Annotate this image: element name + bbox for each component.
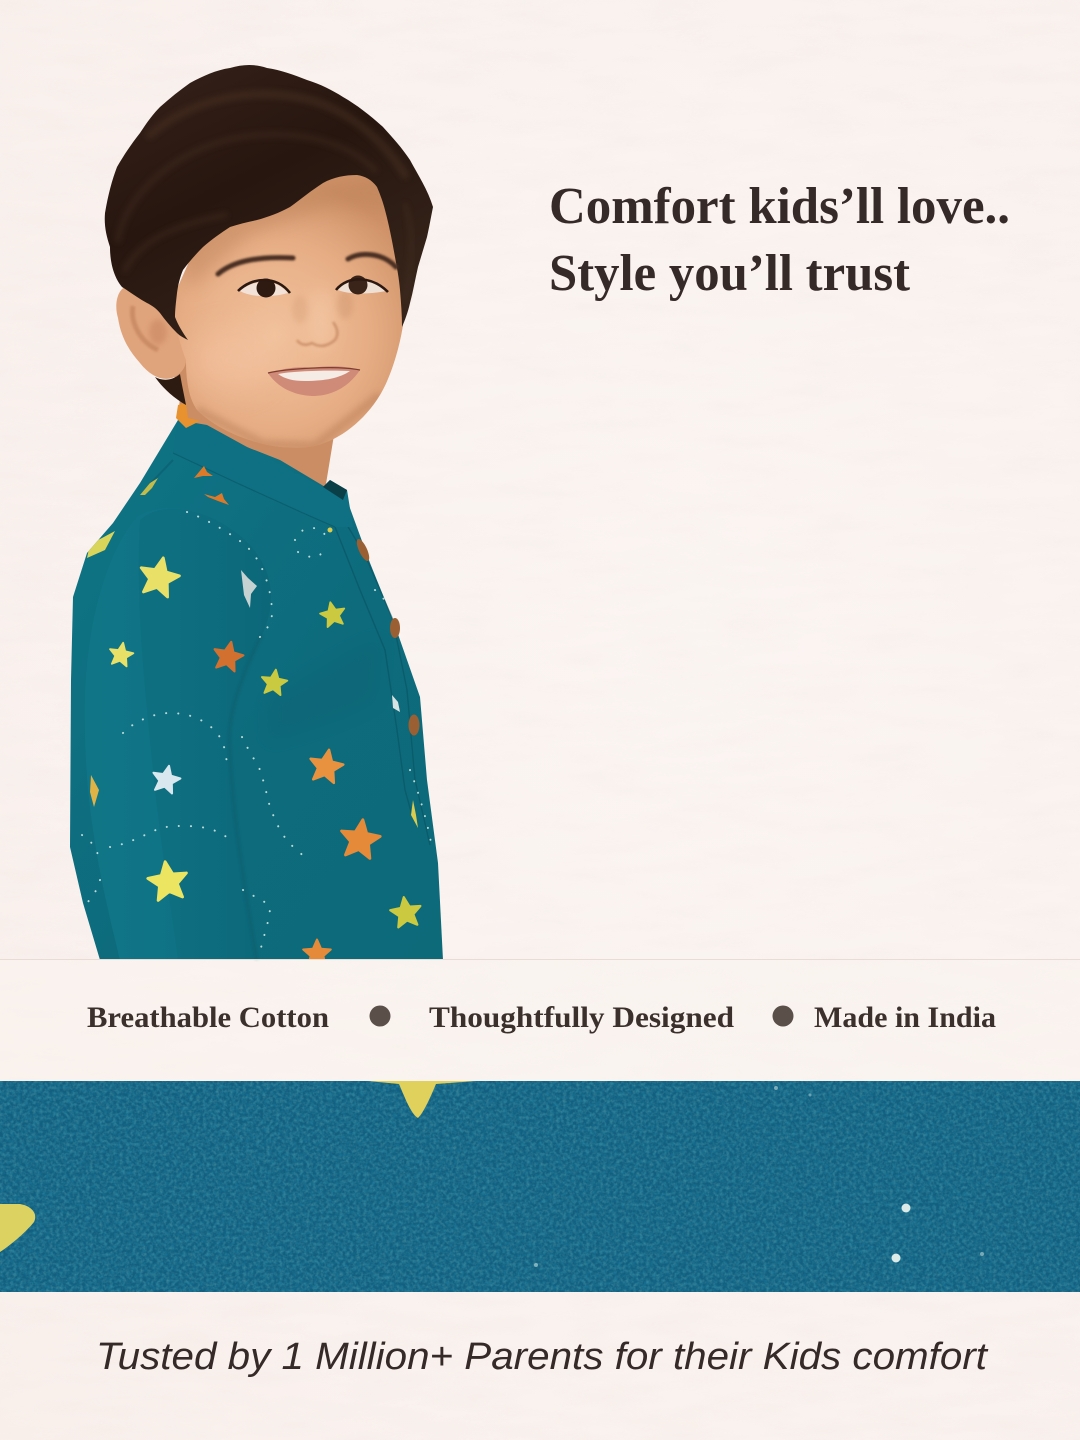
nose xyxy=(297,322,337,346)
separator dot xyxy=(772,1006,794,1026)
headline: Comfort kids’ll love.. xyxy=(549,178,1010,235)
feature: breathable cotton: Breathable Cotton xyxy=(87,1001,329,1034)
eyes and brows xyxy=(218,254,396,298)
hair xyxy=(105,65,433,340)
feature: made in india: Made in India xyxy=(814,1001,996,1034)
fabric star left xyxy=(0,1204,35,1252)
face xyxy=(172,170,404,448)
mouth xyxy=(268,366,360,396)
neck xyxy=(165,340,334,490)
wooden buttons xyxy=(354,537,420,736)
nape hair xyxy=(155,374,186,405)
ear xyxy=(116,286,186,379)
tagline: Tusted by 1 Million+ Parents for their Kids comfort xyxy=(96,1336,989,1378)
kurta body xyxy=(70,420,443,960)
dotted arcs xyxy=(82,512,432,953)
collar xyxy=(173,420,353,527)
separator dot xyxy=(370,1006,390,1026)
teal fabric band xyxy=(0,1081,1080,1292)
fabric star top xyxy=(368,1081,476,1118)
kurta stars xyxy=(87,466,423,966)
photo: smiling boy in teal star kurta xyxy=(70,65,443,966)
feature: thoughtfully designed: Thoughtfully Designed xyxy=(429,1001,734,1034)
orange collar star xyxy=(176,403,200,428)
fabric dots xyxy=(534,1086,984,1267)
placket xyxy=(335,525,430,845)
headline: Style you’ll trust xyxy=(549,245,911,302)
feature strip xyxy=(0,959,1080,1081)
headline xyxy=(549,178,1010,302)
